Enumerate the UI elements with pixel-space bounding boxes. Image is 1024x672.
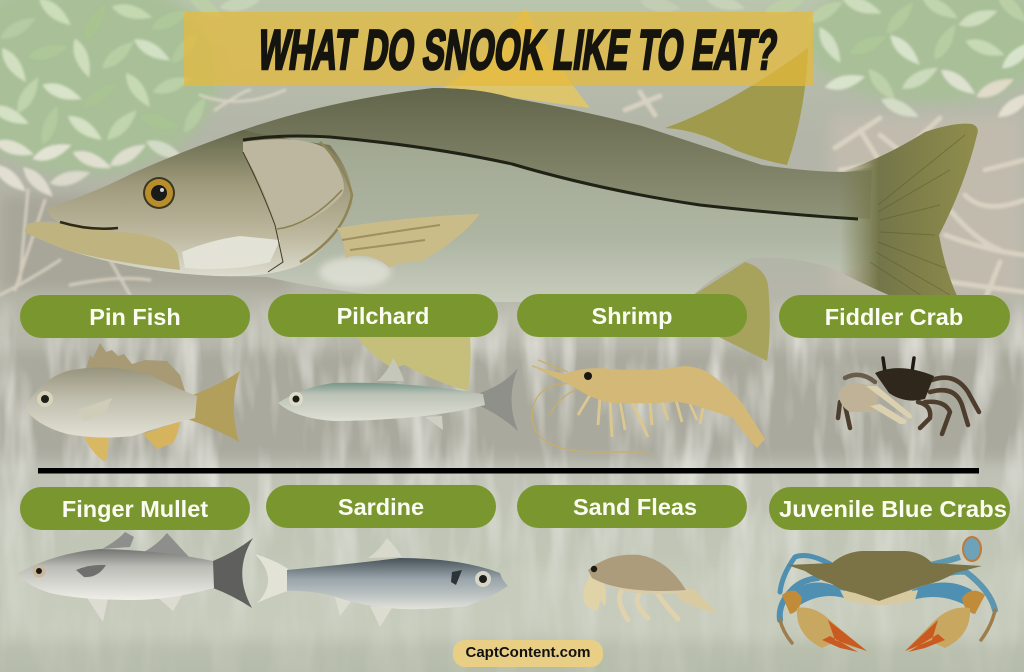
sand flea body	[588, 555, 686, 591]
pilchard tail	[480, 368, 518, 431]
snook back above lateral line	[215, 88, 872, 219]
credit badge	[453, 640, 603, 667]
snook lateral line	[243, 136, 858, 219]
snook gill plate	[243, 139, 344, 229]
mullet lower fins	[87, 585, 188, 622]
snook belly highlight	[319, 257, 391, 287]
credit badge: CaptContent.com	[466, 644, 590, 661]
fiddler crab	[838, 358, 979, 434]
snook second dorsal fin	[665, 48, 808, 165]
sand flea legs	[620, 590, 678, 620]
fiddler crab legs	[838, 375, 979, 434]
pill: Fiddler Crab	[779, 295, 1010, 338]
finger mullet	[18, 532, 253, 622]
pilchard ventral fin	[425, 416, 443, 430]
divider line	[38, 468, 979, 474]
snook gill lines	[60, 142, 352, 272]
fiddler crab shell	[875, 368, 934, 401]
pilchard body	[278, 383, 485, 421]
sand flea tail	[672, 584, 718, 613]
pin fish tail	[187, 371, 240, 442]
sand flea eye	[591, 566, 597, 572]
snook body	[25, 88, 885, 302]
sardine dorsal fin	[368, 538, 402, 558]
pill: Juvenile Blue Crabs	[769, 487, 1010, 530]
title band	[184, 12, 813, 86]
snook fish	[25, 8, 978, 391]
blue crab joints	[782, 591, 985, 614]
snook anal fin	[692, 262, 770, 361]
shrimp eye	[584, 372, 592, 380]
mullet eye	[32, 564, 46, 578]
snook tail rays	[870, 135, 965, 298]
blue crab shell	[787, 551, 982, 601]
pin fish anal fin	[143, 421, 180, 449]
sand flea pale underside	[596, 570, 690, 594]
blue crab walking legs	[780, 556, 995, 643]
pin fish eye	[37, 391, 53, 407]
pin fish pectoral fin	[78, 398, 112, 421]
pill: Juvenile Blue Crabs: Juvenile Blue Crabs	[779, 496, 1007, 522]
pill: Shrimp: Shrimp	[592, 303, 672, 329]
blue crab right claw	[905, 608, 970, 651]
blue crab right arm	[912, 582, 972, 605]
snook tail	[840, 124, 978, 306]
pilchard eye	[289, 392, 303, 406]
shrimp legs	[578, 395, 703, 437]
sardine body	[287, 558, 508, 609]
mullet tail	[213, 538, 253, 608]
pilchard dorsal fin	[377, 358, 404, 381]
snook ventral fin	[355, 335, 471, 391]
snook cheek highlight	[182, 236, 280, 269]
snook lower jaw	[25, 222, 180, 270]
pill: Sardine	[266, 485, 496, 528]
sand flea claw	[583, 576, 606, 610]
pin fish dorsal fin	[85, 343, 186, 394]
fiddler crab big claw	[839, 383, 912, 424]
pill: Sardine: Sardine	[338, 494, 424, 520]
shrimp body	[532, 366, 765, 448]
sand flea	[583, 555, 718, 620]
pill: Pilchard: Pilchard	[337, 303, 429, 329]
mullet dorsal fins	[102, 532, 189, 557]
snook eye	[143, 177, 175, 209]
background: root tangles	[0, 90, 1024, 300]
pill: Finger Mullet	[20, 487, 250, 530]
blue crab	[780, 537, 995, 652]
pill: Pin Fish	[20, 295, 250, 338]
shrimp	[532, 360, 765, 452]
blue crab left claw	[797, 608, 867, 651]
pin fish body	[25, 367, 197, 438]
pill: Finger Mullet: Finger Mullet	[62, 496, 208, 522]
sardine gill	[451, 570, 462, 585]
pin fish	[25, 343, 240, 462]
sardine lower fins	[335, 597, 392, 627]
snook head	[25, 130, 352, 276]
pilchard	[278, 358, 518, 431]
snook first dorsal fin	[443, 8, 590, 108]
mullet pectoral fin	[76, 565, 106, 577]
sardine	[255, 538, 508, 627]
blue crab left arm	[795, 582, 850, 605]
pill: Sand Fleas: Sand Fleas	[573, 494, 697, 520]
pill: Pin Fish: Pin Fish	[89, 304, 181, 330]
background: left leaves	[0, 0, 807, 201]
pill: Sand Fleas	[517, 485, 747, 528]
background: right leaves	[804, 0, 1024, 123]
shrimp antennae	[532, 360, 650, 452]
mullet body	[18, 549, 214, 600]
pill: Shrimp	[517, 294, 747, 337]
fiddler crab eye stalks	[883, 358, 914, 372]
pill: Pilchard	[268, 294, 498, 337]
blue crab underside	[840, 590, 918, 605]
snook pectoral fin	[337, 214, 480, 268]
background: water reflections	[0, 296, 1024, 672]
sardine eye	[475, 571, 491, 587]
pin fish ventral fin	[83, 434, 109, 462]
blue crab paddle leg	[925, 537, 981, 566]
sardine tail	[255, 554, 288, 603]
pill: Fiddler Crab: Fiddler Crab	[825, 304, 963, 330]
